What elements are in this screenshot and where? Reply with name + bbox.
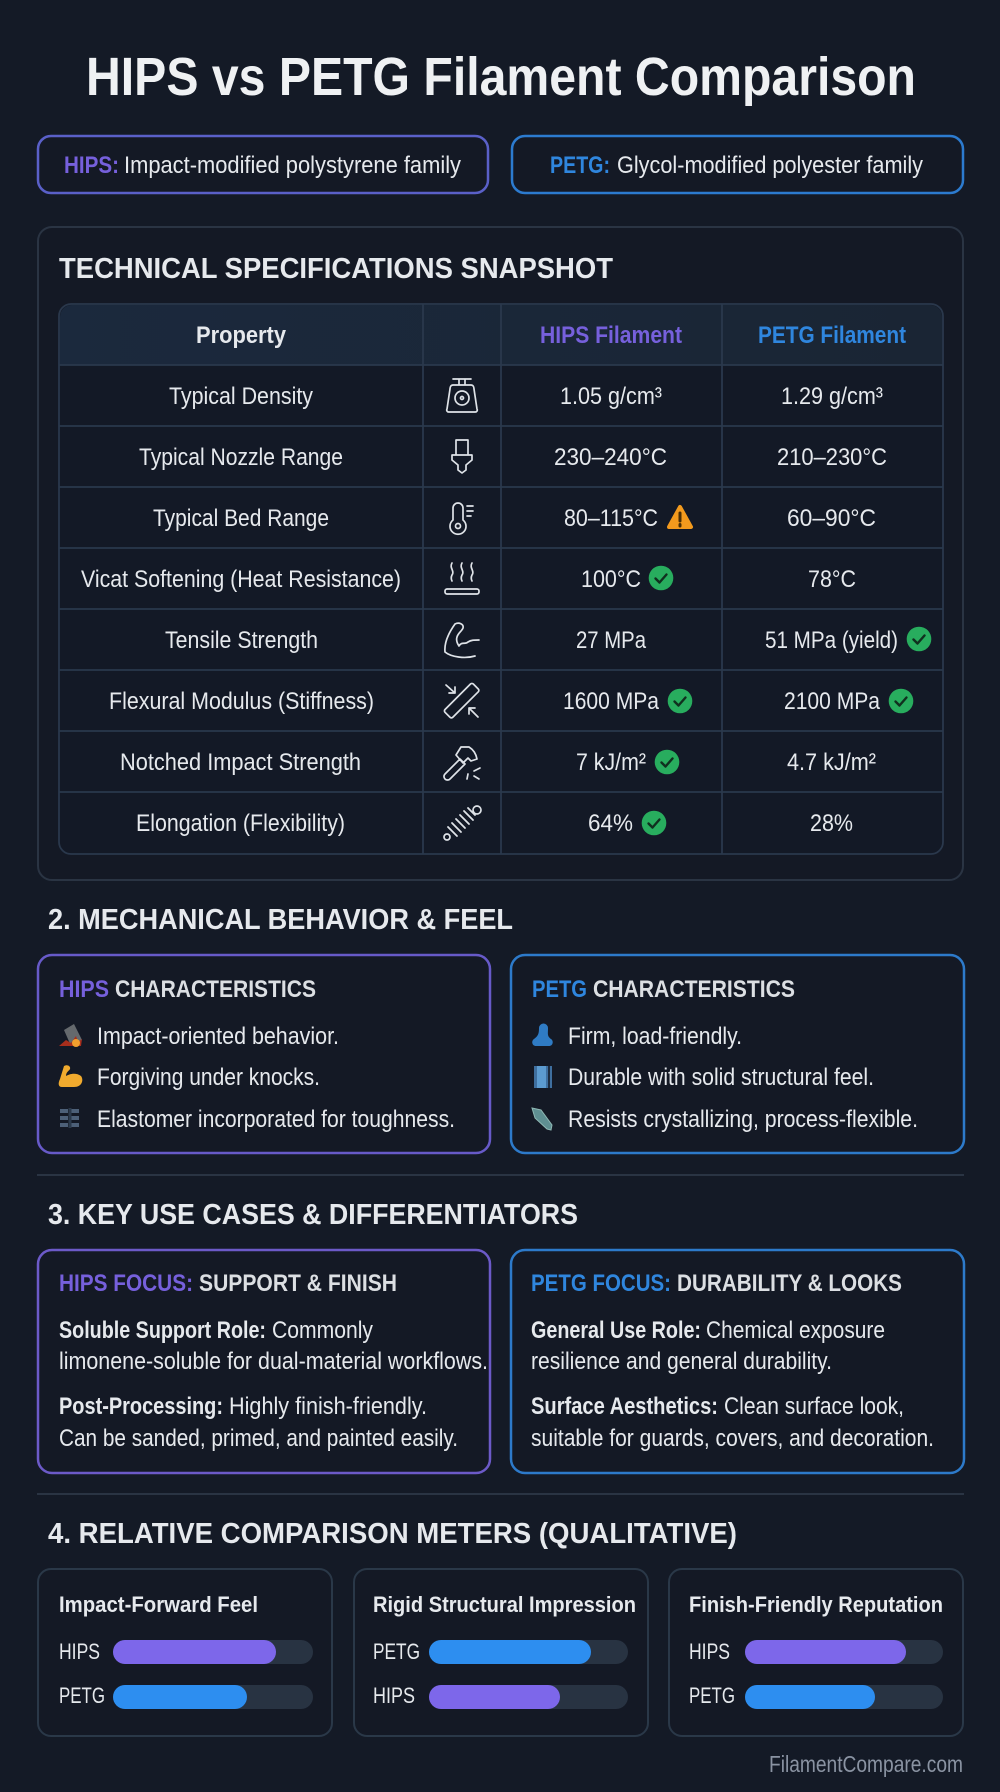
icon: flexed arm [59, 1065, 82, 1087]
subheading: HIPS [59, 976, 109, 1003]
icon: check [907, 627, 931, 651]
meter: PETG: PETG [689, 1683, 735, 1708]
text: general use role: Chemical exposure [706, 1317, 885, 1344]
row: bed range: 60–90°C [787, 505, 876, 532]
icon: bending bar [444, 683, 480, 719]
divider [37, 1493, 964, 1495]
callout: HIPS family [38, 136, 488, 193]
icon: check [642, 811, 666, 835]
meter: PETG [59, 1683, 313, 1709]
row: elongation: 64% [588, 810, 633, 837]
panel: HIPS characteristics: Forgiving under knocks. [97, 1064, 320, 1091]
row: nozzle range: Typical Nozzle Range [139, 444, 343, 471]
text: post-processing: Highly finish-friendly. [229, 1393, 427, 1420]
row: tensile strength: Tensile Strength [165, 627, 318, 654]
text: surface aesthetics: Surface Aesthetics: [531, 1393, 718, 1420]
meter: HIPS: HIPS [689, 1639, 730, 1664]
icon: muscle [445, 623, 479, 657]
divider [37, 1174, 964, 1176]
table header row: Property [196, 322, 287, 349]
row: notched impact: 4.7 kJ/m² [787, 749, 876, 776]
subheading: PETG [532, 976, 587, 1003]
meter: HIPS: HIPS [59, 1639, 100, 1664]
panel: HIPS characteristics: Elastomer incorporated for toughness. [97, 1106, 455, 1133]
row: flexural modulus: Flexural Modulus (Stiffness) [109, 688, 374, 715]
icon: check [655, 750, 679, 774]
title: HIPS vs PETG Filament Comparison [86, 47, 916, 107]
subheading: PETG FOCUS: [531, 1270, 671, 1297]
text: general use role [531, 1317, 885, 1375]
row: notched impact: 7 kJ/m² [576, 749, 646, 776]
subheading: SUPPORT & FINISH [199, 1270, 397, 1297]
panel: PETG characteristics: Resists crystallizing, process-flexible. [568, 1106, 918, 1133]
panel: PETG characteristics: Firm, load-friendly. [568, 1023, 742, 1050]
row: tensile strength [165, 623, 931, 657]
callout: PETG family: PETG: [550, 152, 610, 179]
text: general use role: General Use Role: [531, 1317, 701, 1344]
meter: PETG [689, 1683, 943, 1709]
panel: rigid structural impression [354, 1569, 648, 1736]
callout: PETG family [512, 136, 963, 193]
subheading: DURABILITY & LOOKS [677, 1270, 902, 1297]
text: surface aesthetics: Clean surface look, [724, 1393, 904, 1420]
subheading: CHARACTERISTICS [115, 976, 316, 1003]
text: soluble support role: Soluble Support Role: [59, 1317, 266, 1344]
row: elongation [136, 806, 853, 840]
row: vicat softening: 78°C [808, 566, 856, 593]
row: notched impact: Notched Impact Strength [120, 749, 361, 776]
subheading: HIPS FOCUS: [59, 1270, 193, 1297]
icon: impact [59, 1024, 82, 1047]
row: flexural modulus: 2100 MPa [784, 688, 881, 715]
text: post-processing [59, 1393, 458, 1452]
panel: PETG characteristics: Durable with solid structural feel. [568, 1064, 874, 1091]
panel: impact-forward feel [38, 1569, 332, 1736]
icon: check [889, 689, 913, 713]
row: vicat softening: Vicat Softening (Heat Resistance) [81, 566, 401, 593]
text: surface aesthetics [531, 1393, 934, 1452]
row: vicat softening: 100°C [581, 566, 641, 593]
icon: check [668, 689, 692, 713]
icon: scale [447, 379, 477, 412]
subheading [59, 1270, 397, 1297]
meter: HIPS [689, 1639, 943, 1664]
row: elongation: 28% [810, 810, 853, 837]
text: soluble support role: Commonly [272, 1317, 373, 1344]
icon: spring [444, 806, 481, 840]
panel: technical specifications [38, 227, 963, 880]
icon: elastomer [60, 1108, 80, 1128]
row: density: 1.29 g/cm³ [781, 383, 883, 410]
subheading [531, 1270, 902, 1297]
row: density: Typical Density [169, 383, 313, 410]
text: surface aesthetics: suitable for guards, covers, and decoration. [531, 1425, 934, 1452]
row: bed range [153, 503, 876, 534]
table header row: HIPS Filament [540, 322, 682, 349]
icon: warning [669, 507, 691, 527]
heading: technical specifications: TECHNICAL SPECIFICATIONS SNAPSHOT [59, 253, 613, 285]
panel: HIPS characteristics: Impact-oriented behavior. [97, 1023, 339, 1050]
row: density [169, 379, 883, 412]
icon: block [534, 1066, 552, 1088]
table: specifications [59, 304, 943, 854]
table header row [196, 322, 906, 349]
row: vicat softening [81, 563, 856, 594]
heading: key use cases: 3. KEY USE CASES & DIFFERENTIATORS [48, 1199, 578, 1231]
footer: source: FilamentCompare.com [769, 1751, 963, 1777]
row: density: 1.05 g/cm³ [560, 383, 662, 410]
subheading: CHARACTERISTICS [593, 976, 795, 1003]
subheading [532, 976, 795, 1003]
panel: finish-friendly reputation [669, 1569, 963, 1736]
text: soluble support role: limonene-soluble for dual-material workflows. [59, 1348, 488, 1375]
text: post-processing: Post-Processing: [59, 1393, 223, 1420]
table header row: PETG Filament [758, 322, 906, 349]
row: nozzle range [139, 440, 887, 473]
meter: HIPS [373, 1683, 628, 1709]
text: general use role: resilience and general durability. [531, 1348, 832, 1375]
row: tensile strength: 27 MPa [576, 627, 647, 654]
callout: HIPS family: Impact-modified polystyrene family [124, 152, 461, 179]
icon: hammer [444, 747, 480, 780]
row: nozzle range: 210–230°C [777, 444, 887, 471]
text: post-processing: Can be sanded, primed, and painted easily. [59, 1425, 458, 1452]
meter: HIPS: HIPS [373, 1683, 415, 1708]
icon: crystal [532, 1108, 552, 1130]
row: bed range: 80–115°C [564, 505, 658, 532]
text: soluble support role [59, 1317, 488, 1375]
panel: rigid structural impression: Rigid Structural Impression [373, 1592, 636, 1617]
row: flexural modulus: 1600 MPa [563, 688, 660, 715]
icon: nozzle [452, 440, 472, 473]
row: tensile strength: 51 MPa (yield) [765, 627, 898, 654]
row: flexural modulus [109, 683, 913, 719]
icon: stamp [532, 1024, 553, 1046]
panel: PETG characteristics [511, 955, 964, 1153]
row: elongation: Elongation (Flexibility) [136, 810, 345, 837]
panel: HIPS characteristics [38, 955, 490, 1153]
callout: PETG family: Glycol-modified polyester family [617, 152, 923, 179]
heading: comparison meters: 4. RELATIVE COMPARISON METERS (QUALITATIVE) [48, 1518, 737, 1550]
panel: PETG focus [511, 1250, 964, 1473]
meter: HIPS [59, 1639, 313, 1664]
heading: mechanical behavior: 2. MECHANICAL BEHAVIOR & FEEL [48, 904, 513, 936]
meter: PETG: PETG [59, 1683, 105, 1708]
icon: check [649, 566, 673, 590]
icon: thermometer [450, 503, 473, 534]
icon: heat [445, 563, 479, 594]
row: bed range: Typical Bed Range [153, 505, 329, 532]
panel: HIPS focus [38, 1250, 490, 1473]
row: notched impact [120, 747, 876, 780]
meter: PETG: PETG [373, 1639, 420, 1664]
panel: finish-friendly reputation: Finish-Friendly Reputation [689, 1592, 943, 1617]
row: nozzle range: 230–240°C [554, 444, 667, 471]
meter: PETG [373, 1639, 628, 1664]
callout: HIPS family: HIPS: [64, 152, 119, 179]
panel: impact-forward feel: Impact-Forward Feel [59, 1592, 258, 1617]
